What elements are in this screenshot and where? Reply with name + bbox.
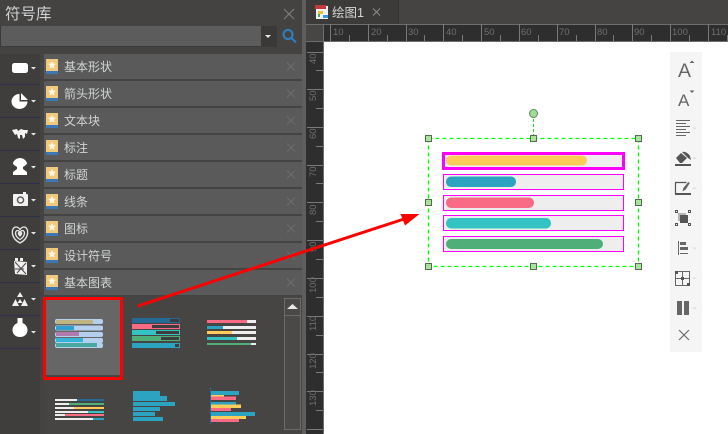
selection frame with handles [426,110,642,270]
icon: decrease font: A [678,91,690,110]
top ruler: 20 [371,27,382,38]
bar 2: blue [444,174,624,190]
category icon column [0,54,40,434]
thumbnail 6 [210,387,255,424]
left ruler: 80 [308,204,319,215]
top ruler: 100 [672,27,688,38]
icon: rectangle [12,63,28,73]
toolbar dropdown carets [692,128,697,310]
icon: close toolbar [679,330,689,340]
search box [0,26,277,47]
icon: close tab [373,8,380,16]
top ruler: 80 [597,27,608,38]
left ruler: 130 [308,390,319,406]
selected bar chart on canvas [426,110,642,270]
top ruler: 10 [333,27,344,38]
left ruler: 70 [308,166,319,177]
thumbnail 3 [207,320,256,345]
shape library list: 标题 [64,168,88,182]
icon: close panel [284,9,294,19]
icon: pie [12,93,28,109]
icon: line edit [675,182,691,195]
bar 4: teal [444,216,624,230]
icon: arrange [676,210,690,226]
icon: triangles [12,292,28,306]
shape library list: 线条 [64,195,88,209]
shape library list: 图标 [64,222,88,236]
shape library list: 基本形状 [64,60,112,74]
thumbnail 2 [132,318,180,348]
icon: increase font: A [678,60,691,82]
icon: arrows cluster [12,129,28,139]
thumbnail 4 [55,399,104,420]
icon: fill bucket [675,152,691,166]
top ruler: 40 [446,27,457,38]
bar 3: pink [444,196,624,210]
left ruler: 60 [308,128,319,139]
icon: grid [675,271,690,286]
top ruler: 50 [484,27,495,38]
icon: heart [12,227,28,243]
chart thumbnail gallery [44,296,302,434]
top ruler: 70 [559,27,570,38]
tab bar [306,0,728,24]
shape library list: 标注 [64,140,88,155]
tab title: 绘图1 [332,5,364,20]
icon: camera [13,192,28,206]
right toolbar [670,52,702,352]
icon: decrease font [678,90,694,110]
top ruler: 60 [521,27,532,38]
thumbnail 5 [133,391,175,421]
icon: columns [677,301,689,315]
red highlight box [44,298,122,378]
icon: drawing file [315,5,328,19]
left ruler: 40 [308,53,319,64]
shape library list: 文本块 [64,113,100,128]
icon: search [284,30,296,42]
shape library list: 设计符号 [64,248,112,263]
thumbnail 1: selected [46,300,120,375]
left ruler: 90 [308,241,319,252]
left ruler [306,42,324,434]
shape library list: 箭头形状 [64,86,112,101]
shape library list [44,54,302,295]
bar 5: green [444,236,624,252]
left ruler: 110 [308,316,319,331]
icon: person [13,158,27,175]
shape library list: 基本图表 [64,276,112,290]
top ruler [306,24,728,42]
heading: symbol library: 符号库 [5,5,52,23]
icon: flask [12,318,28,337]
icon: align [678,241,688,255]
top ruler: 110 [711,27,726,38]
left ruler: 100 [308,277,319,293]
arrow: from thumbnail to chart [138,214,420,306]
left ruler: 120 [308,353,319,369]
icon: text align [676,120,690,136]
left ruler: 50 [308,90,319,101]
scrollbar [284,298,300,430]
top ruler: 90 [634,27,645,38]
top ruler: 30 [408,27,419,38]
bar 1: yellow [444,154,624,168]
icon: shapes [14,258,27,275]
